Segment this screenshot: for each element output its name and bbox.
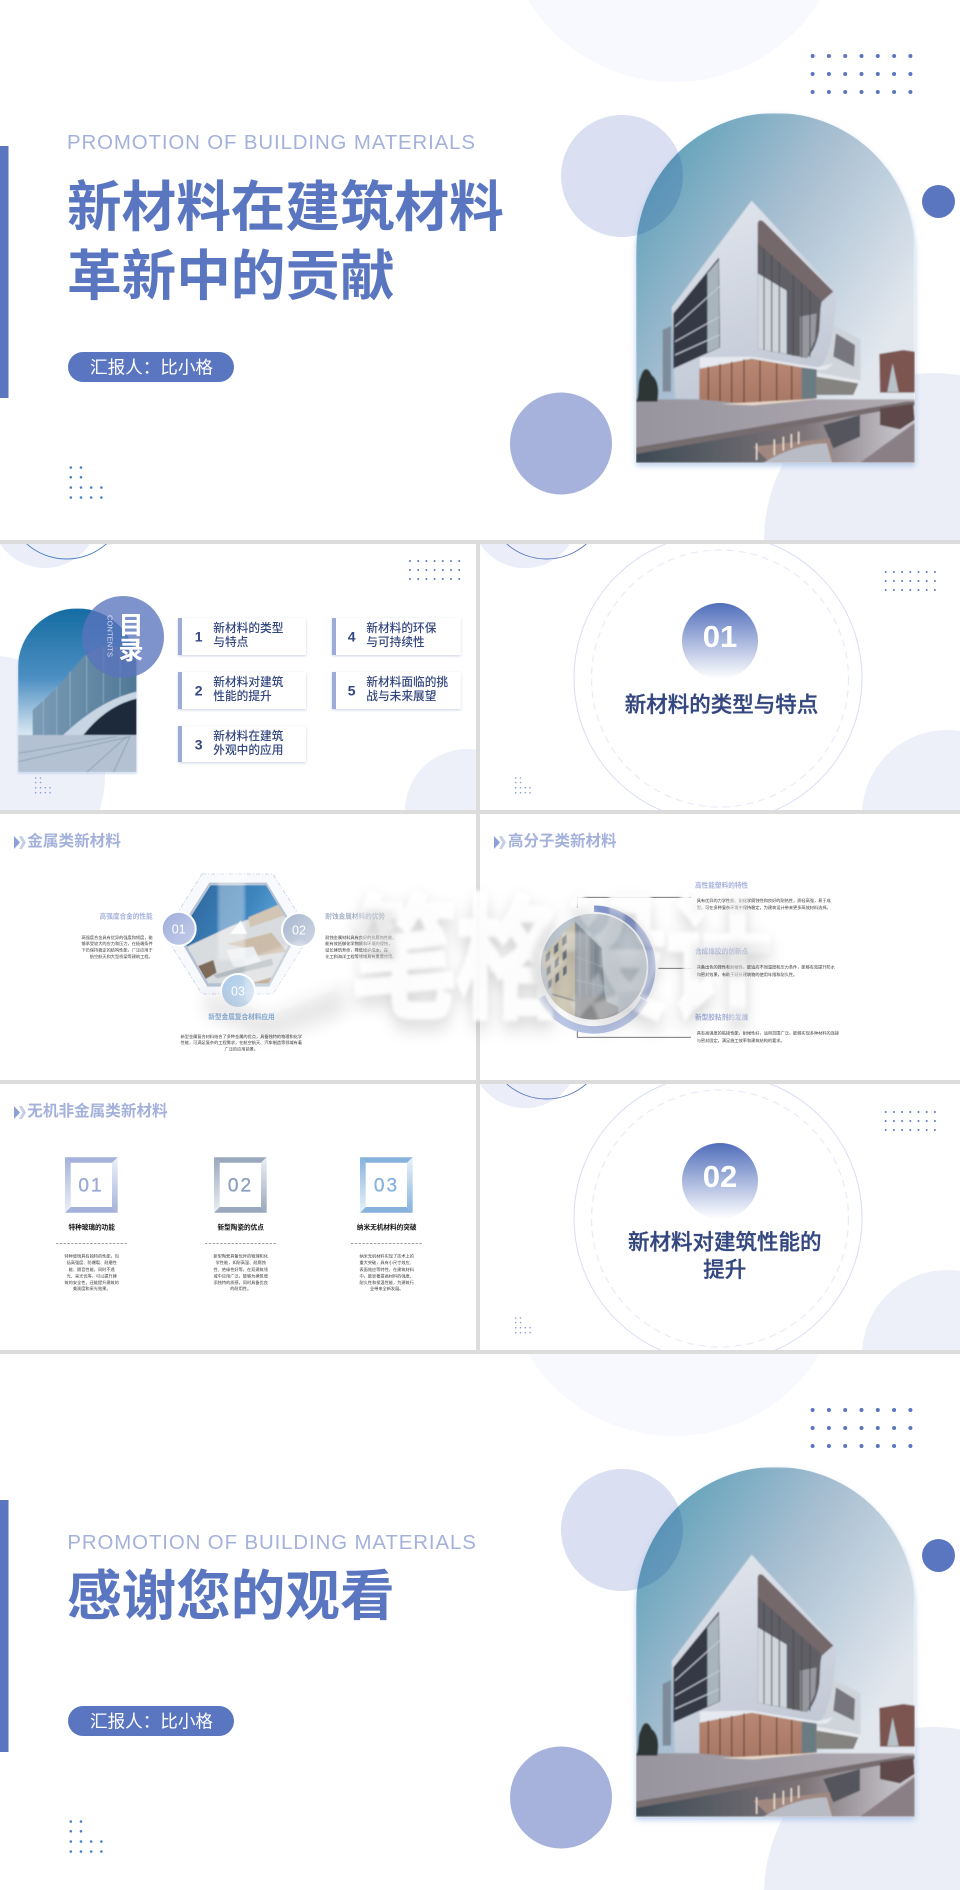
contents item 5: 新材料面临的挑 (366, 675, 448, 689)
contents item 2 (178, 672, 306, 709)
card 01 (56, 1157, 127, 1292)
closing subtitle: PROMOTION OF BUILDING MATERIALS (67, 1532, 476, 1554)
inorganic heading icon (14, 1106, 26, 1119)
panel: table of contents (0, 544, 476, 810)
cover title: 新材料在建筑材料 (67, 177, 504, 238)
card 02: 02 (228, 1176, 253, 1196)
cover subtitle: PROMOTION OF BUILDING MATERIALS (67, 132, 475, 154)
contents heading circle (82, 596, 164, 678)
contents item 4: 新材料的环保 (366, 621, 437, 635)
panel: inorganic materials (0, 1084, 476, 1350)
contents arched photo (18, 608, 137, 772)
node 03 (220, 973, 256, 1009)
metal heading icon (14, 836, 26, 849)
card 03: 重大突破，具有小尺寸效应、 (359, 1259, 414, 1266)
card 03: 表面效应等特性，在建筑材料 (359, 1266, 415, 1273)
section 01 number: 01 (703, 619, 737, 654)
text block: rubber (695, 946, 836, 978)
contents item 2: 性能的提升 (213, 689, 272, 703)
contents item 3: 3 (195, 736, 203, 752)
text block: high strength alloys: 高强度合金具有优异的强度和韧度，能 (81, 934, 153, 941)
contents heading circle: 录 (118, 637, 144, 665)
text block: plastics: 高性能塑料的特性 (695, 880, 748, 890)
node 02: 02 (292, 924, 306, 938)
node 01 (161, 911, 197, 947)
inorganic heading: 无机非金属类新材料 (27, 1101, 168, 1120)
card 02: 新型陶瓷的优点 (217, 1222, 264, 1231)
contents item 4: 4 (348, 628, 356, 644)
card 03: 中，能显著提高材料的强度、 (359, 1272, 414, 1280)
contents item 5 (332, 672, 461, 709)
progress ring (542, 909, 652, 1030)
contents item 3: 外观中的应用 (213, 743, 283, 757)
text block: metal composites (181, 1012, 302, 1052)
card 02: 性、绝缘性好等，在双建筑领 (213, 1266, 269, 1273)
text block: metal composites: 广泛的应用前景。 (225, 1045, 258, 1052)
card 02: 的耐用性。 (230, 1285, 251, 1292)
text block: high strength alloys: 高强度合金的性能 (100, 912, 153, 920)
circular building photo (539, 912, 650, 1023)
card 03 (351, 1157, 422, 1292)
card 02: 域中应用广泛，能够为建筑增 (213, 1272, 268, 1280)
section 01 background and number circle (480, 534, 960, 822)
text block: adhesives: 与密封固定，满足施工效率和建筑结构的要求。 (697, 1037, 785, 1044)
watermark overlay (204, 874, 774, 1040)
card 01: 美观度和采光效果。 (73, 1285, 111, 1292)
contents item 4 (332, 618, 461, 655)
panel: polymer materials (480, 814, 960, 1080)
contents item 5: 战与未来展望 (366, 689, 437, 703)
text block: high strength alloys (81, 912, 153, 960)
text block: adhesives: 新型胶粘剂的发展 (695, 1012, 748, 1022)
contents heading circle: CONTENTS (106, 615, 114, 657)
node 02 (281, 912, 317, 948)
card 03: 纳米无机材料的突破 (357, 1222, 417, 1231)
contents item 4: 与可持续性 (366, 635, 425, 649)
text block: rubber: 和密封效果，有助于延长建筑物的使用年限和耐久性。 (697, 971, 797, 978)
node 03: 03 (231, 985, 245, 999)
text block: metal composites: 新型金属复合材料应用 (208, 1012, 275, 1021)
card 03: 03 (374, 1176, 399, 1196)
text block: metal composites: 性能，可满足复杂的工程需求，在航空航天、汽车制造等领域有着 (181, 1039, 302, 1046)
card 01: 01 (78, 1176, 104, 1196)
cover title: 革新中的贡献 (67, 246, 395, 307)
text block: high strength alloys: 下仍保持稳定的结构性能，广泛应用于 (81, 947, 153, 954)
polymer heading icon (494, 836, 506, 849)
contents item 3: 新材料在建筑 (213, 729, 284, 743)
text block: plastics (695, 880, 831, 911)
contents item 5: 5 (348, 682, 356, 698)
section 02 background and number circle (480, 1074, 960, 1362)
section 01 title: 新材料的类型与特点 (625, 693, 818, 717)
card 01: 特种玻璃具有独特的性能，包 (64, 1252, 120, 1260)
metal heading: 金属类新材料 (27, 831, 121, 850)
text block: high strength alloys: 够承受较大的应力和压力，在极端条件 (81, 940, 153, 947)
panel: metal materials (0, 814, 476, 1080)
cover corner circle bottom strip (764, 536, 960, 540)
card 02: 新型陶瓷具备优异的物理和化 (213, 1252, 269, 1260)
text block: plastics: 具有优异的力学性能、耐化学腐蚀性和良好的耐热性，质轻高强，易于成 (697, 897, 831, 904)
section 02 title: 新材料对建筑性能的 (628, 1230, 821, 1254)
section 02 title: 提升 (703, 1258, 746, 1282)
closing title: 感谢您的观看 (67, 1566, 395, 1627)
watermark overlay: 笔格设计 (350, 884, 773, 1036)
card 03: 业带来全新发展。 (370, 1285, 403, 1292)
text block: rubber: 具备出色的弹性和耐候性，能适应不同温度和压力条件，能够有效提升防水 (697, 964, 836, 970)
dashed hexagon frame (164, 874, 311, 994)
text block: corrosion resistant metals: 延长建筑寿命，降低维护成本，在 (325, 947, 388, 954)
text block: corrosion resistant metals (325, 912, 397, 960)
text block: metal composites: 新型金属复合材料结合了多种金属的优点，具备独特的物理和化学 (181, 1033, 302, 1040)
card 01: 能、隔音性能，同时不透 (69, 1266, 116, 1273)
contents item 1 (178, 618, 306, 655)
hexagon photo (184, 882, 291, 987)
contents item 1: 1 (195, 628, 203, 644)
card 01: 括高强度、防爆裂、耐磨性 (67, 1259, 117, 1266)
card 03: 耐久性和保温性能，为建筑行 (359, 1279, 414, 1286)
panel: section 02 (480, 1074, 960, 1362)
card 01: 光、采光优等，可以提升建 (67, 1272, 118, 1280)
panel: section 01 (480, 534, 960, 822)
contents item 2: 2 (195, 682, 203, 698)
node 01: 01 (172, 922, 186, 936)
card 02 (205, 1157, 276, 1292)
card 01: 筑的安全性，还能提升建筑的 (64, 1279, 119, 1286)
contents item 1: 新材料的类型 (213, 621, 284, 635)
contents heading circle: 目 (118, 612, 144, 640)
card 01: 特种玻璃的功能 (68, 1222, 115, 1231)
text block: corrosion resistant metals: 耐蚀金属材料的优势 (325, 912, 385, 920)
text block: adhesives: 具有高强度的粘接性能，耐候性好，适用范围广泛，能够实现多种材料的连接 (697, 1030, 840, 1036)
polymer heading: 高分子类新材料 (508, 831, 617, 850)
panel: cover slide (0, 0, 960, 540)
card 02: 添独特的质感，同时具备优良 (213, 1279, 268, 1286)
connector lines (577, 897, 691, 1037)
text block: corrosion resistant metals: 化工和海洋工程等领域具有重要应用。 (325, 953, 397, 960)
card 03: 纳米无机材料实现了技术上的 (359, 1252, 414, 1260)
contents item 1: 与特点 (213, 635, 249, 649)
card 02: 学性能，如耐高温、耐腐蚀 (216, 1259, 266, 1266)
text block: high strength alloys: 航空航天和大型桥梁等建筑工程。 (90, 953, 153, 960)
closing artwork: circles, dots, bar, reporter pill, arched building photo (0, 1408, 960, 1890)
contents background decoration (0, 544, 476, 810)
text block: corrosion resistant metals: 耐蚀金属材料具有良好的抗腐蚀性能， (325, 934, 397, 941)
text block: plastics: 型，可在多种复杂环境中保持稳定，为建筑设计带来更多高效材料选择。 (697, 904, 831, 911)
text block: rubber: 合成橡胶的创新点 (695, 946, 748, 956)
contents item 2: 新材料对建筑 (213, 675, 284, 689)
contents item 3 (178, 726, 306, 762)
text block: adhesives (695, 1012, 840, 1044)
text block: corrosion resistant metals: 能有效抵御化学物质和环境的侵蚀， (325, 940, 392, 947)
watermark overlay: 笔格设计 (350, 893, 773, 1044)
panel: thank-you slide (0, 1354, 960, 1890)
cover artwork: circles, dots, bar, reporter pill, arched building photo (0, 54, 960, 536)
section 02 number: 02 (703, 1159, 737, 1194)
